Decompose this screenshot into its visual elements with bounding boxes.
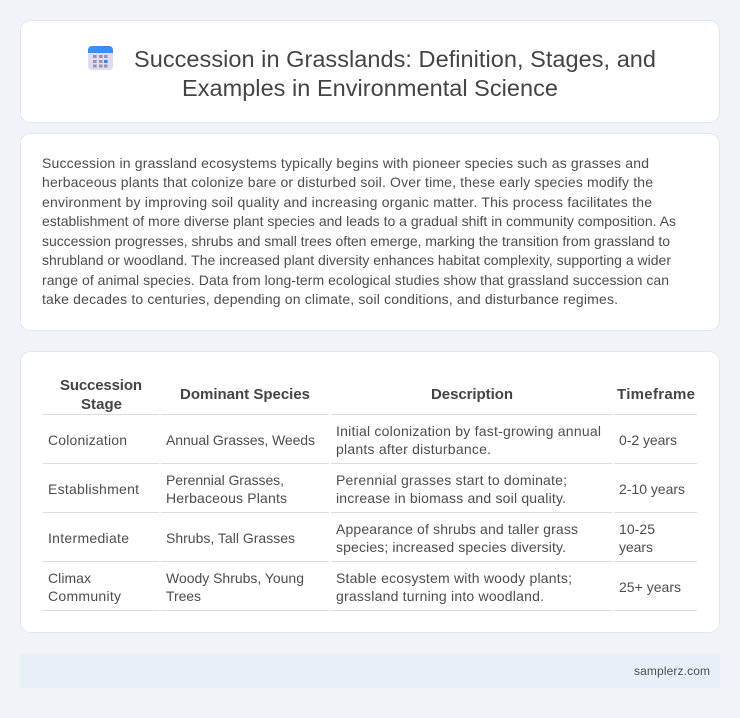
table row: intermediate (43, 521, 697, 562)
table header row: Stage (81, 396, 122, 413)
table row: intermediate: Intermediate (48, 530, 129, 546)
table row: climax community: Woody Shrubs, Young (166, 570, 304, 586)
text block: intro paragraph: take decades to centuries, depending on climate, soil conditions, and disturbance regimes. (42, 291, 618, 307)
table row: climax community: Stable ecosystem with woody plants; (336, 570, 572, 586)
text block: intro paragraph: Succession in grassland ecosystems typically begins with pioneer species such as grasses and (42, 155, 649, 171)
table row: intermediate: 10-25 (619, 521, 655, 537)
table header row: Succession (60, 377, 142, 394)
table header row: Dominant Species (180, 386, 310, 403)
text block: intro paragraph (42, 155, 676, 307)
table header row: Timeframe (617, 386, 695, 403)
table row: establishment: Perennial grasses start to dominate; (336, 472, 567, 488)
footer: samplerz.com (634, 664, 710, 678)
table row: establishment: 2-10 years (619, 481, 685, 497)
footer (20, 654, 720, 688)
table header row (43, 377, 697, 415)
title: Succession in Grasslands: Definition, Stages, and (134, 46, 656, 72)
table row: climax community: 25+ years (619, 579, 681, 595)
table row: establishment: Perennial Grasses, (166, 472, 284, 488)
icon: calendar (88, 46, 113, 70)
table row: climax community: Trees (166, 588, 201, 604)
table row: establishment (43, 472, 697, 513)
text block: intro paragraph: environment by improving soil quality and increasing organic matter. This process facilitates the (42, 194, 652, 210)
table row: intermediate: Appearance of shrubs and taller grass (336, 521, 578, 537)
title (134, 46, 656, 101)
text block: intro paragraph: range of animal species. Data from long-term ecological studies show that grassland succession can (42, 272, 669, 288)
table row: colonization (43, 423, 697, 464)
table row: climax community: Community (48, 588, 121, 604)
table row: colonization: 0-2 years (619, 432, 677, 448)
text block: intro paragraph: succession progresses, shrubs and small trees often emerge, marking the transition from grassland to (42, 233, 670, 249)
table row: climax community: Climax (48, 570, 91, 586)
panel: title card (20, 20, 720, 122)
table row: establishment: increase in biomass and soil quality. (336, 490, 566, 506)
panel: succession table (20, 352, 720, 632)
panel: introduction text (20, 134, 720, 330)
table row: colonization: Initial colonization by fast-growing annual (336, 423, 601, 439)
text block: intro paragraph: herbaceous plants that colonize bare or disturbed soil. Over time, these early species modify the (42, 174, 653, 190)
text block: intro paragraph: establishment of more diverse plant species and leads to a gradual shift in community composition. As (42, 213, 676, 229)
table row: establishment: Establishment (48, 481, 139, 497)
table row: establishment: Herbaceous Plants (166, 490, 287, 506)
table row: colonization: plants after disturbance. (336, 441, 491, 457)
table row: colonization: Colonization (48, 432, 127, 448)
table row: intermediate: species; increased species diversity. (336, 539, 566, 555)
table header row: Description (431, 386, 513, 403)
table row: climax community: grassland turning into woodland. (336, 588, 544, 604)
table row: climax community (43, 570, 697, 611)
table row: intermediate: years (619, 539, 653, 555)
table row: intermediate: Shrubs, Tall Grasses (166, 530, 295, 546)
table row: colonization: Annual Grasses, Weeds (166, 432, 315, 448)
title: Examples in Environmental Science (182, 75, 558, 101)
text block: intro paragraph: shrubland or woodland. The increased plant diversity enhances habitat complexity, supporting a wider (42, 252, 671, 268)
